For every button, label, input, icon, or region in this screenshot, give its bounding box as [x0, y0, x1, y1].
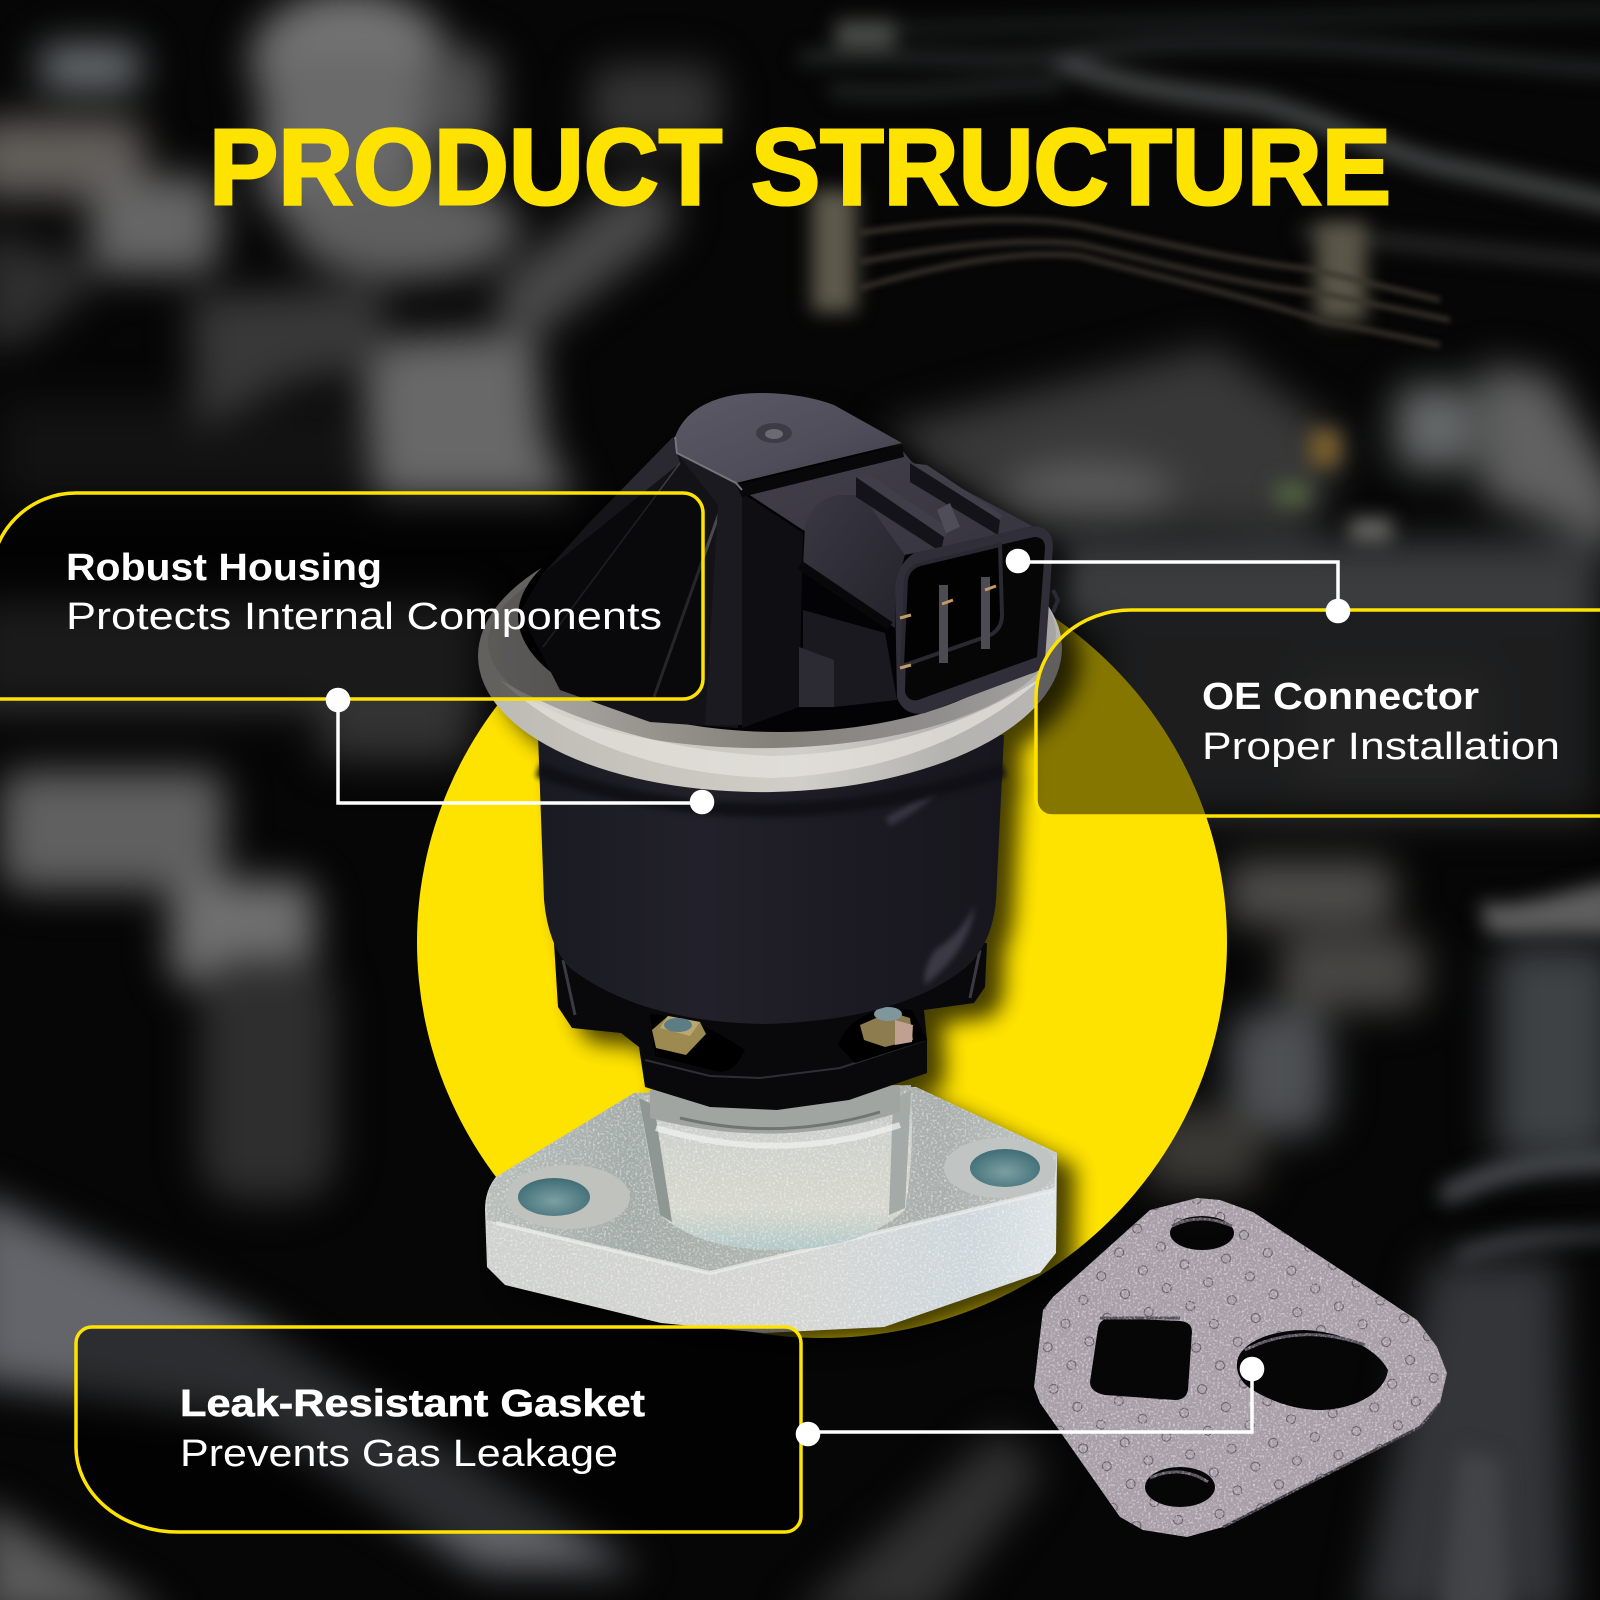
black cylinder: [538, 735, 1004, 1024]
yellow circle behind product: [417, 546, 1227, 1338]
leader line: housing: [326, 688, 714, 814]
description: protects internal components: Protects Internal Components: [66, 596, 662, 638]
heading: robust housing: Robust Housing: [66, 547, 382, 589]
hex nut left: [652, 1016, 706, 1055]
title: PRODUCT STRUCTURE: [209, 106, 1391, 227]
callout panel: OE connector: [1036, 610, 1600, 816]
flange base: [485, 1087, 1057, 1333]
cast neck: [639, 1085, 912, 1250]
gasket: [1034, 1198, 1447, 1537]
flange bolt hole right: [944, 1138, 1056, 1198]
steel ring: [476, 500, 1064, 797]
flange bolt hole left: [506, 1165, 630, 1229]
callout panel: robust housing: [0, 493, 703, 699]
housing column: [677, 453, 803, 728]
description: proper installation: Proper Installation: [1202, 726, 1560, 768]
heading: OE connector: OE Connector: [1202, 676, 1479, 718]
heading: leak-resistant gasket: Leak-Resistant Gasket: [180, 1383, 645, 1425]
leader line: connector: [1006, 549, 1350, 623]
description: prevents gas leakage: Prevents Gas Leakage: [180, 1433, 618, 1475]
callout panel: leak-resistant gasket: [76, 1327, 801, 1532]
housing fin: [520, 437, 738, 728]
black bracket: [554, 943, 987, 1110]
leader line: gasket: [796, 1357, 1264, 1446]
connector body: [799, 463, 1002, 707]
hex nut right: [860, 1007, 913, 1047]
connector socket: [895, 526, 1058, 714]
connector top face: [742, 450, 1036, 560]
product: EGR valve: [476, 393, 1064, 1333]
housing cap: [675, 393, 904, 497]
